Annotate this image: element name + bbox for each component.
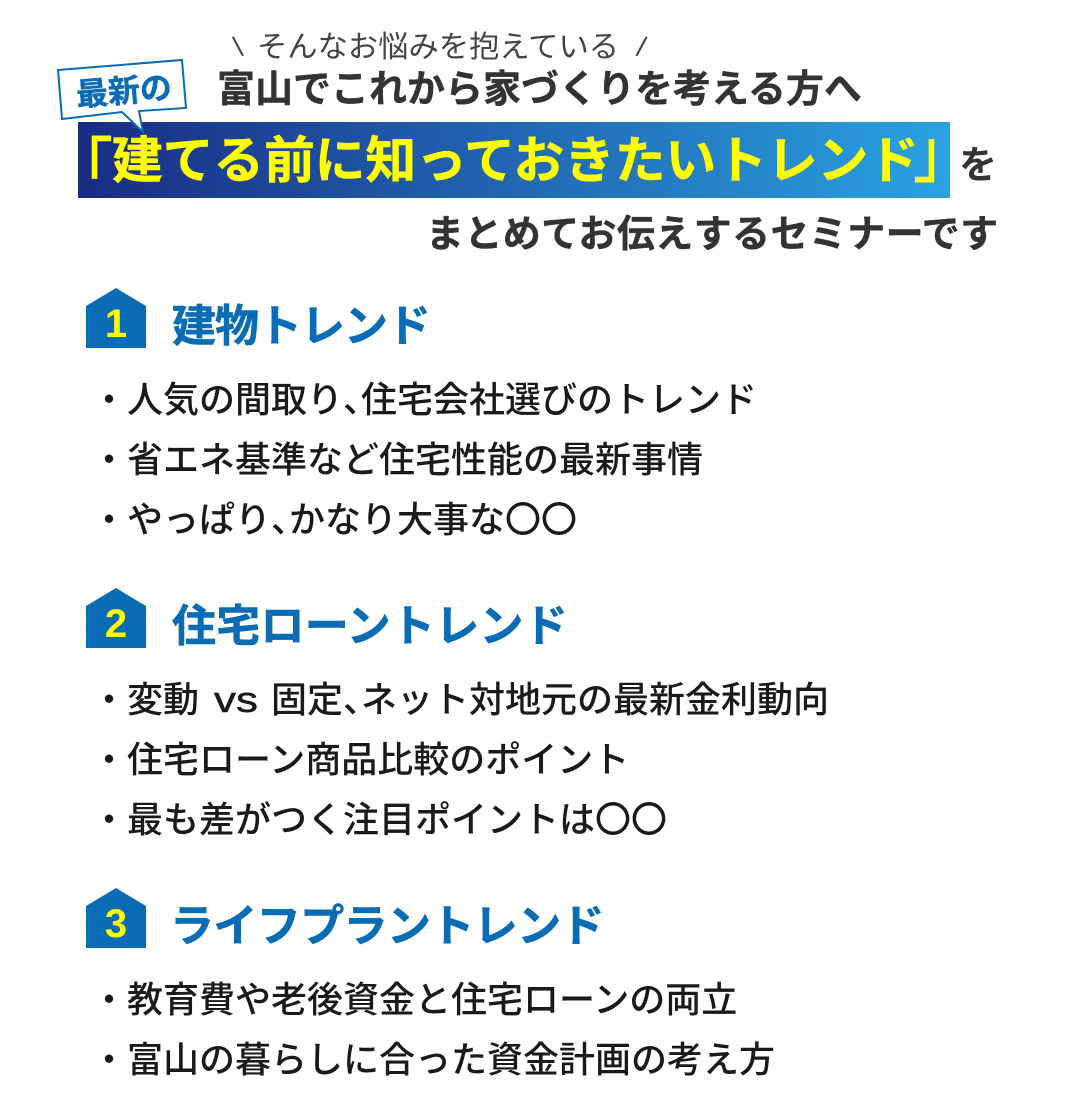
list item: ・富山の暮らしに合った資金計画の考え方 xyxy=(91,1039,775,1080)
list item: ・人気の間取り、住宅会社選びのトレンド xyxy=(91,379,757,420)
heading: ライフプラントレンド xyxy=(170,902,604,951)
list item: ・住宅ローン商品比較のポイント xyxy=(91,739,629,780)
callout: latest: 最新の xyxy=(75,69,173,113)
list item: ・最も差がつく注目ポイントは〇〇 xyxy=(91,799,667,840)
heading: 建物トレンド xyxy=(172,302,430,351)
icon: house 2: 2 xyxy=(105,602,127,646)
list item: ・変動 固定、ネット対地元の最新金利動向 xyxy=(91,679,829,720)
icon: house 1: 1 xyxy=(105,302,127,346)
list item: ・省エネ基準など住宅性能の最新事情 xyxy=(91,439,703,480)
tagline: / xyxy=(634,34,649,62)
title band xyxy=(78,122,950,198)
list item: ・やっぱり、かなり大事な〇〇 xyxy=(91,499,577,540)
section 2 xyxy=(86,588,829,840)
title band: 」 xyxy=(913,115,973,190)
tagline: そんなお悩みを抱えている xyxy=(257,31,619,64)
list item: ・教育費や老後資金と住宅ローンの両立 xyxy=(91,979,737,1020)
particle: を xyxy=(959,145,997,187)
icon: house 1 xyxy=(86,288,146,348)
icon: house 3: 3 xyxy=(105,902,127,946)
tagline: \ xyxy=(231,34,245,62)
section 1 xyxy=(86,288,757,540)
title band: 建てる前に知っておきたいトレンド xyxy=(112,132,919,189)
intro heading: 富山でこれから家づくりを考える方へ xyxy=(217,69,862,111)
subheading: まとめてお伝えするセミナーです xyxy=(426,214,999,256)
list item: vs xyxy=(214,679,258,720)
icon: house 3 xyxy=(86,888,146,948)
section 3 xyxy=(86,888,775,1080)
icon: house 2 xyxy=(86,588,146,648)
title band: 「 xyxy=(53,132,113,207)
callout: latest xyxy=(56,58,188,135)
heading: 住宅ローントレンド xyxy=(172,602,568,651)
